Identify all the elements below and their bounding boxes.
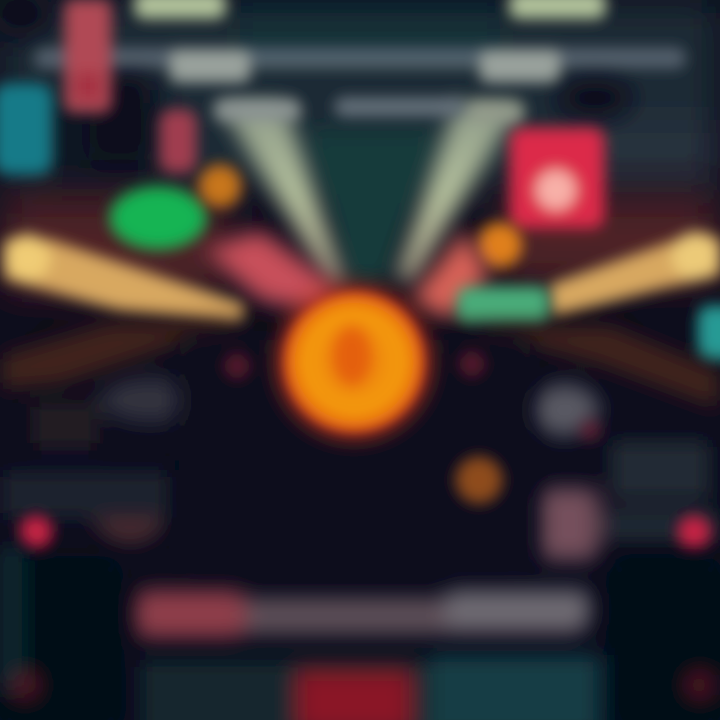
dim orange coin <box>456 457 502 503</box>
icon: teal edge tile <box>698 306 720 360</box>
coin symbol <box>332 326 372 386</box>
icon: red app tile <box>510 128 604 228</box>
background: warm band behind beams <box>0 195 720 295</box>
bottom section <box>0 545 720 720</box>
central bitcoin coin <box>278 286 430 438</box>
faint red accents <box>224 351 600 440</box>
background: upper teal haze <box>0 0 720 190</box>
light beams forming V <box>220 105 520 285</box>
icon: green pill <box>110 187 206 249</box>
bottom base strip <box>135 590 590 638</box>
beam bar left <box>4 235 245 322</box>
icon: small orange coin left <box>199 165 241 207</box>
pink glow near coin <box>205 230 490 320</box>
beam bar right <box>550 232 720 316</box>
central dark panel <box>180 340 530 570</box>
side maroon arms <box>0 322 720 410</box>
dark patches at top <box>0 0 631 160</box>
icon: small orange coin right <box>478 223 522 267</box>
red dots <box>20 516 710 548</box>
center teal triangle <box>305 130 440 285</box>
left icon column: pink tag <box>65 0 196 172</box>
lower grey blurred blocks <box>0 376 720 560</box>
icon: teal app tile <box>0 84 52 174</box>
blurred header text band <box>35 48 685 122</box>
icon: green label right <box>457 287 549 323</box>
top glow labels <box>135 0 605 18</box>
